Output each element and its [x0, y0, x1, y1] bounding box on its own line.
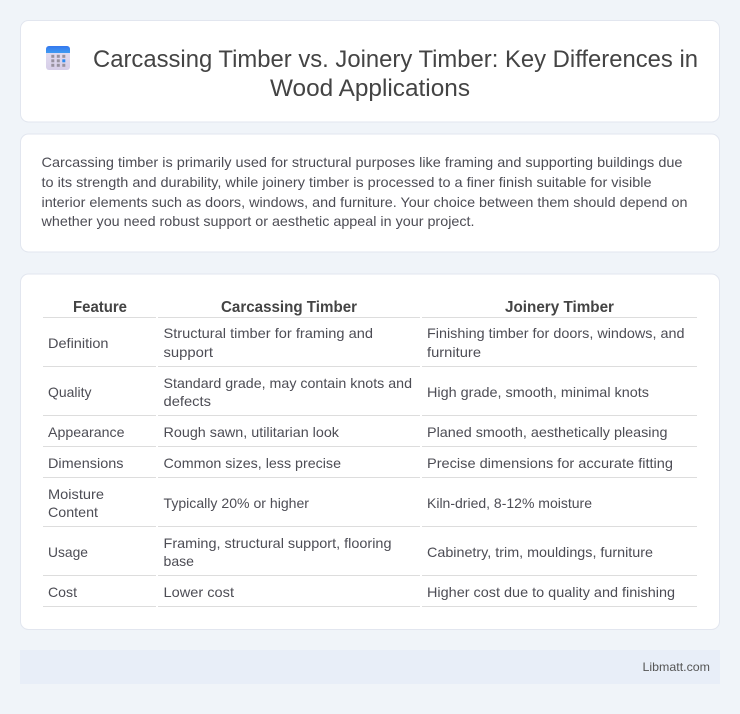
row: moisture content: Content — [48, 504, 98, 520]
row: dimensions: Common sizes, less precise — [164, 455, 341, 471]
table header row: Feature — [73, 299, 127, 316]
row: usage: Usage — [48, 544, 88, 560]
intro text block: interior elements such as doors, windows, and furniture. Your choice between them should depend on — [42, 194, 688, 210]
table header row: Joinery Timber — [505, 299, 614, 316]
row: appearance: Rough sawn, utilitarian look — [164, 424, 340, 440]
table header row: Carcassing Timber — [221, 299, 357, 316]
row: cost — [43, 584, 697, 607]
title — [93, 46, 698, 102]
row: definition: furniture — [427, 344, 481, 360]
row: dimensions: Dimensions — [48, 455, 124, 471]
row: quality: defects — [164, 393, 211, 409]
row: quality: Standard grade, may contain knots and — [164, 375, 412, 391]
row: dimensions: Precise dimensions for accurate fitting — [427, 455, 673, 471]
row: definition: Structural timber for framing and — [164, 325, 373, 341]
title: Wood Applications — [270, 75, 470, 102]
intro text block: Carcassing timber is primarily used for structural purposes like framing and supporting buildings due — [42, 154, 683, 170]
row: appearance — [43, 424, 697, 447]
row: cost: Higher cost due to quality and finishing — [427, 584, 675, 600]
footer bar — [20, 650, 720, 684]
row: usage: base — [164, 553, 194, 569]
panel: comparison table — [20, 274, 720, 630]
row: appearance: Planed smooth, aesthetically pleasing — [427, 424, 668, 440]
row: quality: Quality — [48, 384, 92, 400]
title: Carcassing Timber vs. Joinery Timber: Key Differences in — [93, 46, 698, 73]
table header row — [43, 299, 697, 318]
row: moisture content — [43, 486, 697, 527]
intro text block — [40, 154, 687, 229]
row: quality — [43, 375, 697, 416]
row: usage: Framing, structural support, flooring — [164, 535, 392, 551]
row: appearance: Appearance — [48, 424, 125, 440]
row: quality: High grade, smooth, minimal knots — [427, 384, 649, 400]
intro text block: whether you need robust support or aesthetic appeal in your project. — [40, 213, 475, 229]
row: definition: Finishing timber for doors, windows, and — [427, 325, 684, 341]
row: dimensions — [43, 455, 697, 478]
row: cost: Lower cost — [164, 584, 234, 600]
row: definition: support — [164, 344, 213, 360]
icon: calendar — [46, 46, 70, 70]
header panel — [20, 20, 720, 122]
row: moisture content: Moisture — [48, 486, 104, 502]
row: moisture content: Kiln-dried, 8-12% moisture — [427, 495, 592, 511]
row: moisture content: Typically 20% or higher — [164, 495, 309, 511]
row: cost: Cost — [48, 584, 77, 600]
panel: introduction — [20, 134, 720, 252]
row: definition: Definition — [48, 335, 108, 351]
footer credit: Libmatt.com — [642, 660, 710, 674]
row: definition — [43, 325, 697, 367]
intro text block: to its strength and durability, while joinery timber is processed to a finer finish suitable for visible — [42, 174, 652, 190]
row: usage — [43, 535, 697, 576]
row: usage: Cabinetry, trim, mouldings, furniture — [427, 544, 653, 560]
